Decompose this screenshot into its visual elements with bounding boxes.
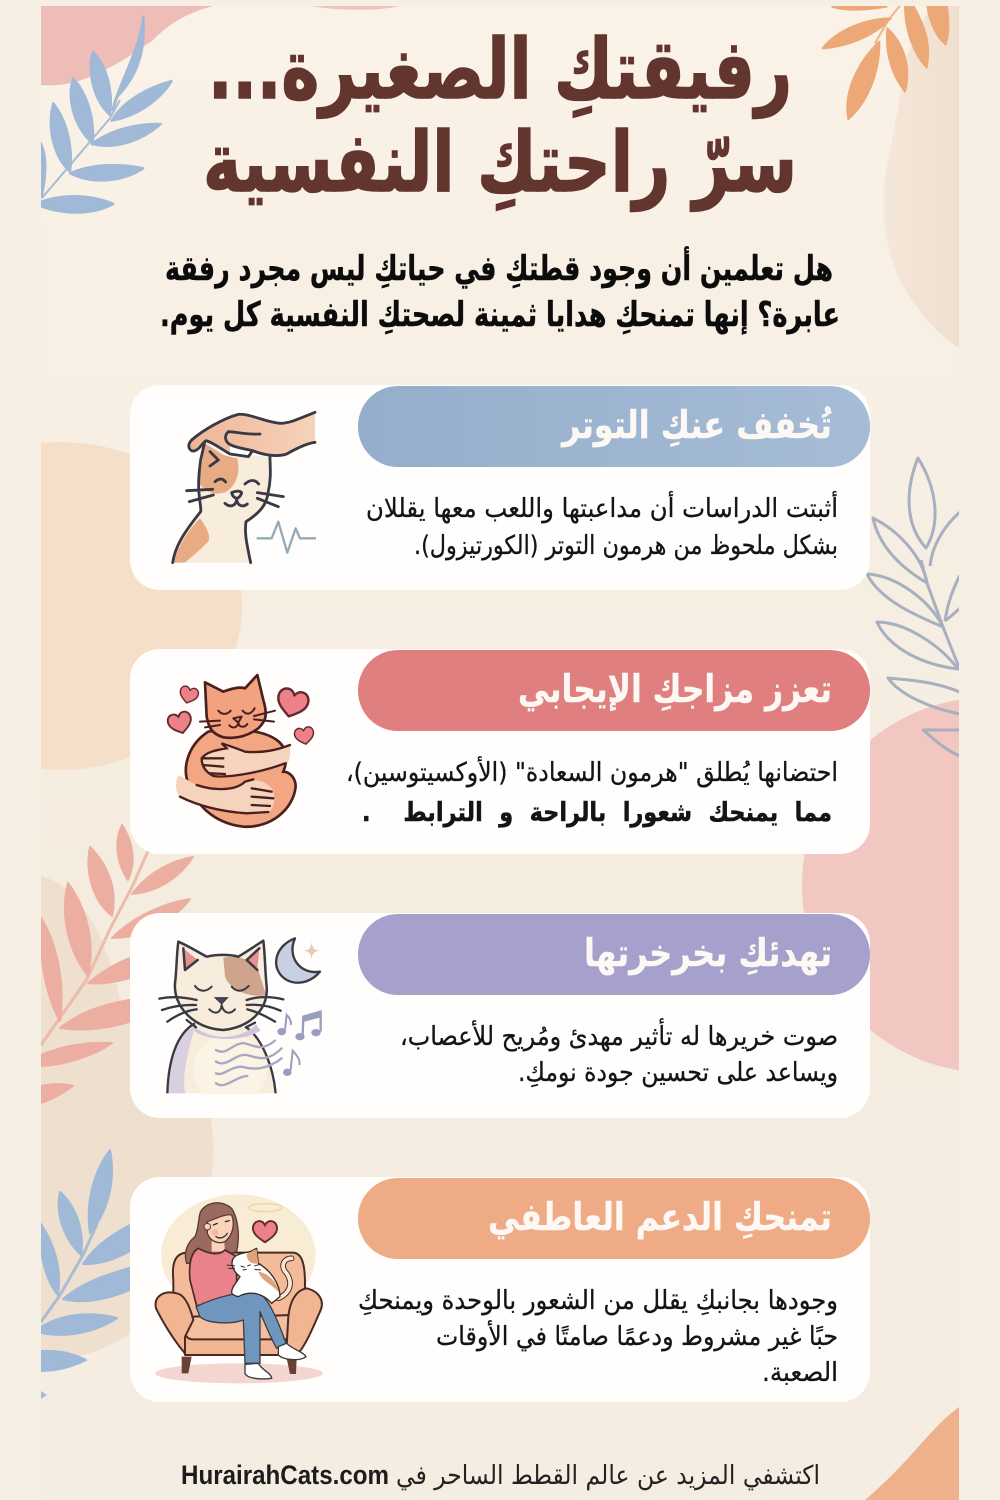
shape: peach circle left	[41, 442, 242, 770]
intro text	[160, 246, 840, 335]
heading: تُخفف عنكِ التوتر	[560, 403, 832, 448]
card background	[130, 1177, 870, 1402]
shape: beige blob lower left	[41, 876, 213, 1360]
panel: boosts mood	[130, 649, 870, 854]
shape: pink blob top centre	[312, 6, 400, 10]
heading: تمنحكِ الدعم العاطفي	[488, 1195, 832, 1240]
body text: أثبتت الدراسات أن مداعبتها واللعب معها يقللان	[366, 490, 838, 524]
body text: ويساعد على تحسين جودة نومكِ.	[518, 1058, 838, 1088]
heading: تهدئكِ بخرخرتها	[584, 931, 832, 976]
leaf: outline right	[867, 458, 960, 756]
panel: emotional support	[130, 1177, 870, 1402]
body text: وجودها بجانبكِ يقلل من الشعور بالوحدة ويمنحكِ	[358, 1286, 838, 1316]
leaf: blue top left	[41, 17, 172, 213]
heading: تعزز مزاجكِ الإيجابي	[518, 667, 832, 712]
body text: صوت خريرها له تأثير مهدئ ومُريح للأعصاب،	[400, 1017, 838, 1052]
body text: احتضانها يُطلق "هرمون السعادة" (الأوكسيتوسين)،	[346, 755, 838, 788]
heading pill	[358, 650, 870, 731]
shape: pink circle right	[802, 700, 959, 1070]
icon: cat being hugged with hearts	[166, 675, 315, 827]
card background	[130, 913, 870, 1118]
shape: orange corner bottom right	[865, 1407, 959, 1500]
body text: مما يمنحك شعورا بالراحة و الترابط .	[362, 798, 832, 828]
title line 1: رفيقتكِ الصغيرة...	[208, 21, 792, 119]
panel: calms you with purring	[130, 913, 870, 1118]
shape: beige blob right top	[884, 6, 959, 348]
shape: pink blob top left	[41, 6, 213, 85]
footer	[181, 1460, 820, 1491]
leaf: pink left	[40, 825, 193, 1103]
body text: بشكل ملحوظ من هرمون التوتر (الكورتيزول).	[414, 531, 838, 561]
body text	[346, 755, 838, 828]
body text: الصعبة.	[762, 1358, 838, 1388]
card background	[130, 649, 870, 854]
title	[203, 21, 797, 212]
title line 2: سرّ راحتكِ النفسية	[203, 114, 797, 212]
heading pill	[358, 1178, 870, 1259]
icon: woman on armchair with cat	[155, 1194, 323, 1383]
panel: reduces stress	[130, 385, 870, 590]
body text	[400, 1017, 838, 1088]
body text: حبًا غير مشروط ودعمًا صامتًا في الأوقات	[436, 1319, 838, 1352]
footer arabic text: اكتشفي المزيد عن عالم القطط الساحر في	[396, 1461, 820, 1491]
card background	[130, 385, 870, 590]
icon: hand petting cat	[173, 412, 316, 563]
body text	[366, 490, 838, 561]
icon: sleeping cat purring with moon and music notes	[159, 938, 321, 1107]
leaf: orange top right	[823, 6, 948, 119]
footer website: HurairahCats.com	[181, 1460, 389, 1490]
heading pill	[358, 386, 870, 467]
heading pill	[358, 914, 870, 995]
leaf: blue lower left	[41, 1149, 130, 1399]
body text	[358, 1286, 838, 1388]
